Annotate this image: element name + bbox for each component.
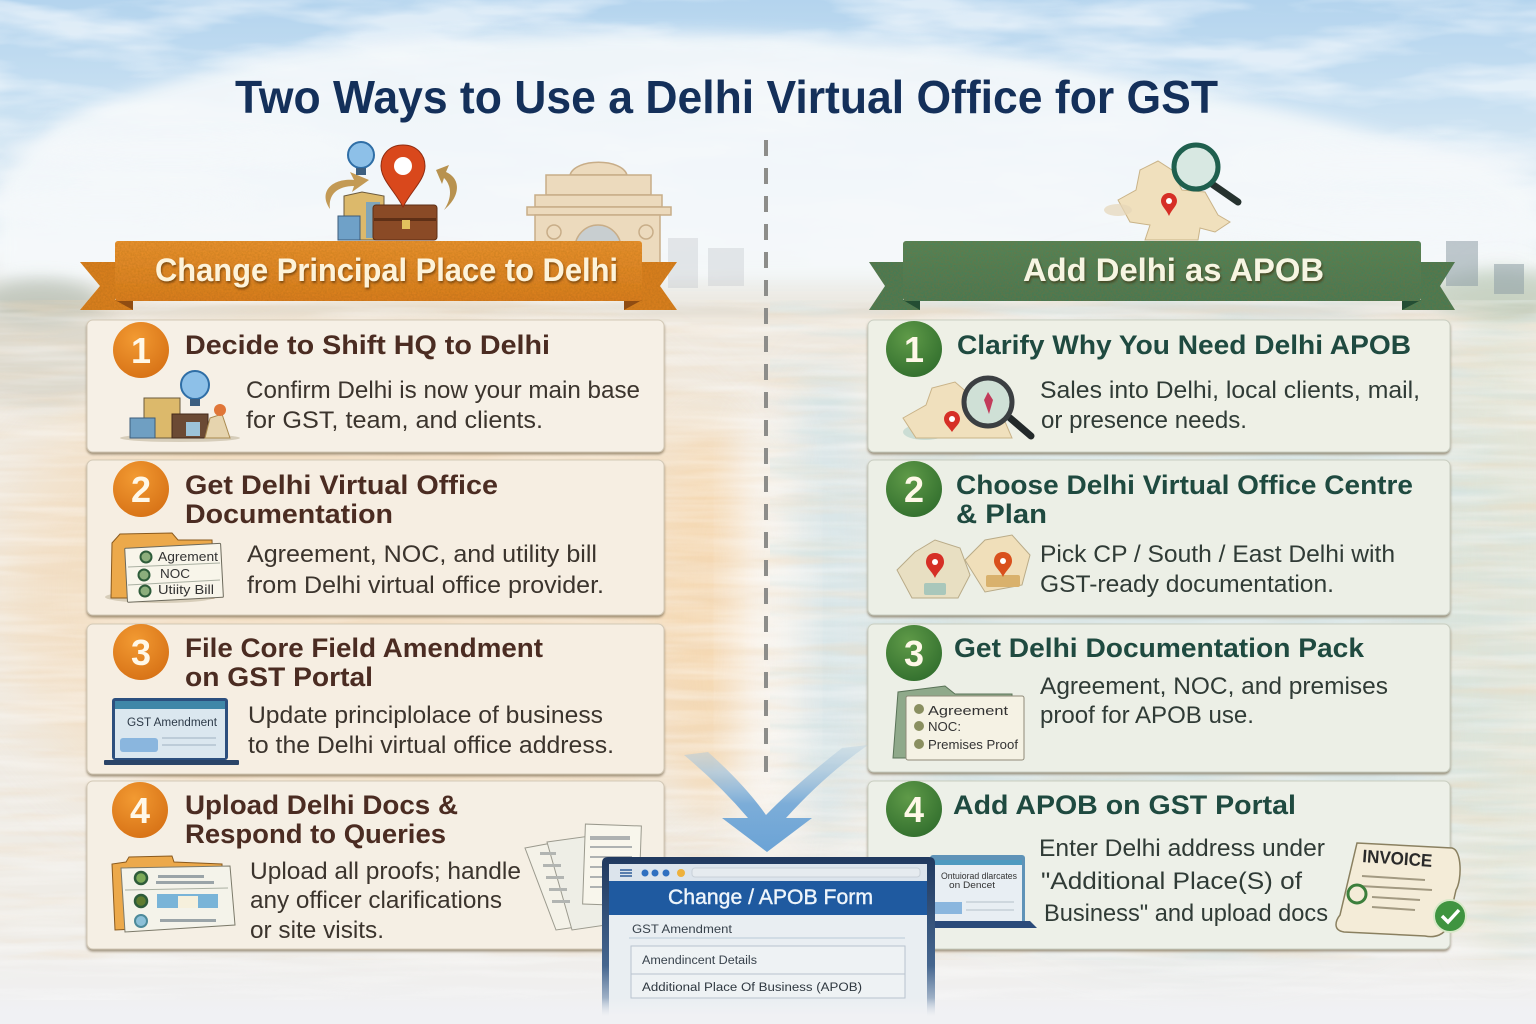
icon: document folder: Agrement — [158, 549, 218, 564]
banner label: Add Delhi as APOB — [1023, 252, 1324, 288]
step body — [1040, 541, 1395, 598]
panel: left step 3 — [87, 624, 664, 774]
panel: right step 4 — [868, 781, 1466, 949]
step number 2: 2 — [131, 469, 151, 510]
step number 2: 2 — [904, 469, 924, 510]
central dashed divider — [764, 140, 768, 778]
form title: Change / APOB Form — [668, 886, 873, 909]
step body: Pick CP / South / East Delhi with — [1040, 541, 1395, 568]
panel: Change / APOB form window — [602, 857, 935, 1024]
step body: Update principlolace of business — [248, 702, 603, 729]
step number 3 — [886, 625, 942, 681]
icon: documentation folder — [893, 686, 1024, 760]
icon: map and magnifier — [903, 378, 1031, 440]
step heading: Choose Delhi Virtual Office Centre — [956, 470, 1413, 500]
step body: Business" and upload docs — [1044, 900, 1328, 927]
step body: Agreement, NOC, and utility bill — [247, 541, 597, 568]
step number 1 — [886, 321, 942, 377]
panel: right step 2 — [868, 460, 1450, 615]
step heading — [185, 790, 458, 849]
step number 2 — [886, 461, 942, 517]
step number 3: 3 — [904, 633, 924, 674]
step body: for GST, team, and clients. — [246, 407, 543, 434]
step body — [250, 858, 521, 944]
icon: Delhi map with magnifier — [1104, 145, 1238, 240]
icon: document folder: Utiity Bill — [158, 582, 214, 597]
icon: folder with proofs — [112, 856, 235, 932]
icon: office with bulb — [120, 371, 240, 442]
step number 4: 4 — [130, 790, 150, 831]
icon: laptop with GST amendment: GST Amendment — [127, 717, 218, 729]
form fields: Amendincent Details — [642, 955, 757, 967]
step body: Upload all proofs; handle — [250, 858, 521, 885]
step body: "Additional Place(S) of — [1041, 868, 1302, 895]
step number 4 — [886, 781, 942, 837]
step body: Confirm Delhi is now your main base — [246, 377, 640, 404]
step heading: Documentation — [185, 499, 393, 529]
icon: laptop with GST amendment — [104, 698, 239, 765]
icon: stack of paper documents — [525, 824, 641, 930]
step body: Sales into Delhi, local clients, mail, — [1040, 377, 1420, 404]
step body: from Delhi virtual office provider. — [247, 572, 604, 599]
icon: small portal laptop: on Dencet — [949, 880, 995, 891]
step heading: Add APOB on GST Portal — [953, 790, 1296, 820]
step heading: on GST Portal — [185, 662, 373, 692]
step number 1 — [113, 322, 169, 378]
step number 3: 3 — [131, 632, 151, 673]
step body: or site visits. — [250, 917, 384, 944]
icon: invoice with check: INVOICE — [1362, 846, 1433, 871]
banner: Add Delhi as APOB — [869, 241, 1455, 310]
step heading: Clarify Why You Need Delhi APOB — [957, 330, 1411, 360]
step heading — [185, 470, 498, 529]
panel: left step 2 — [87, 460, 664, 615]
step body — [246, 377, 640, 434]
step body: proof for APOB use. — [1040, 702, 1254, 729]
icon: documentation folder: Premises Proof — [928, 737, 1018, 752]
skyline: faint buildings right — [1446, 241, 1524, 294]
panel: left step 4 — [87, 781, 664, 949]
step heading: File Core Field Amendment — [185, 633, 543, 663]
panel: right step 1 — [868, 320, 1450, 452]
panel: left step 1 — [87, 320, 664, 452]
step number 1: 1 — [131, 330, 151, 371]
step body — [1039, 835, 1328, 927]
icon: small portal laptop: Ontuiorad dlarcates — [941, 871, 1017, 882]
step number 4: 4 — [904, 789, 924, 830]
step body: to the Delhi virtual office address. — [248, 732, 614, 759]
step body: GST-ready documentation. — [1040, 571, 1334, 598]
bottom fade — [0, 998, 1536, 1024]
icon: documentation folder: NOC: — [928, 719, 961, 734]
step heading: Upload Delhi Docs & — [185, 790, 458, 820]
step body — [247, 541, 604, 599]
step heading — [185, 633, 543, 692]
step heading: Get Delhi Documentation Pack — [954, 633, 1365, 663]
step body: any officer clarifications — [250, 887, 502, 914]
step body: Enter Delhi address under — [1039, 835, 1325, 862]
step heading — [956, 470, 1413, 529]
icon: document folder: NOC — [160, 566, 190, 581]
step number 3 — [113, 624, 169, 680]
step number 4 — [112, 782, 168, 838]
step body — [1040, 377, 1420, 434]
step body — [248, 702, 614, 759]
icon: small portal laptop — [930, 855, 1037, 928]
form subtitle: GST Amendment — [632, 922, 733, 936]
step heading: Respond to Queries — [185, 819, 446, 849]
banner: Change Principal Place to Delhi — [80, 241, 677, 310]
banner label: Change Principal Place to Delhi — [155, 252, 618, 288]
step heading: & Plan — [956, 499, 1047, 529]
title: Two Ways to Use a Delhi Virtual Office for GST — [235, 71, 1218, 123]
step number 1: 1 — [904, 329, 924, 370]
step heading: Get Delhi Virtual Office — [185, 470, 498, 500]
icon: relocation cluster with bulb, pin and briefcase — [326, 142, 457, 240]
icon: documentation folder: Agreement — [928, 703, 1008, 718]
form fields — [631, 946, 905, 998]
step body: or presence needs. — [1041, 407, 1247, 434]
form fields: Additional Place Of Business (APOB) — [642, 982, 862, 994]
arrow: blue merging arrow into form — [684, 745, 868, 852]
browser toolbar icons — [620, 868, 920, 877]
skyline: faint buildings left — [668, 238, 744, 288]
panel: right step 3 — [868, 624, 1450, 772]
icon: document folder — [105, 533, 223, 603]
icon: two Delhi maps with pins — [897, 535, 1030, 598]
icon: India Gate — [527, 162, 671, 265]
step number 2 — [113, 461, 169, 517]
icon: invoice with check — [1336, 843, 1466, 937]
step body — [1040, 673, 1388, 729]
step body: Agreement, NOC, and premises — [1040, 673, 1388, 700]
step heading: Decide to Shift HQ to Delhi — [185, 330, 550, 360]
